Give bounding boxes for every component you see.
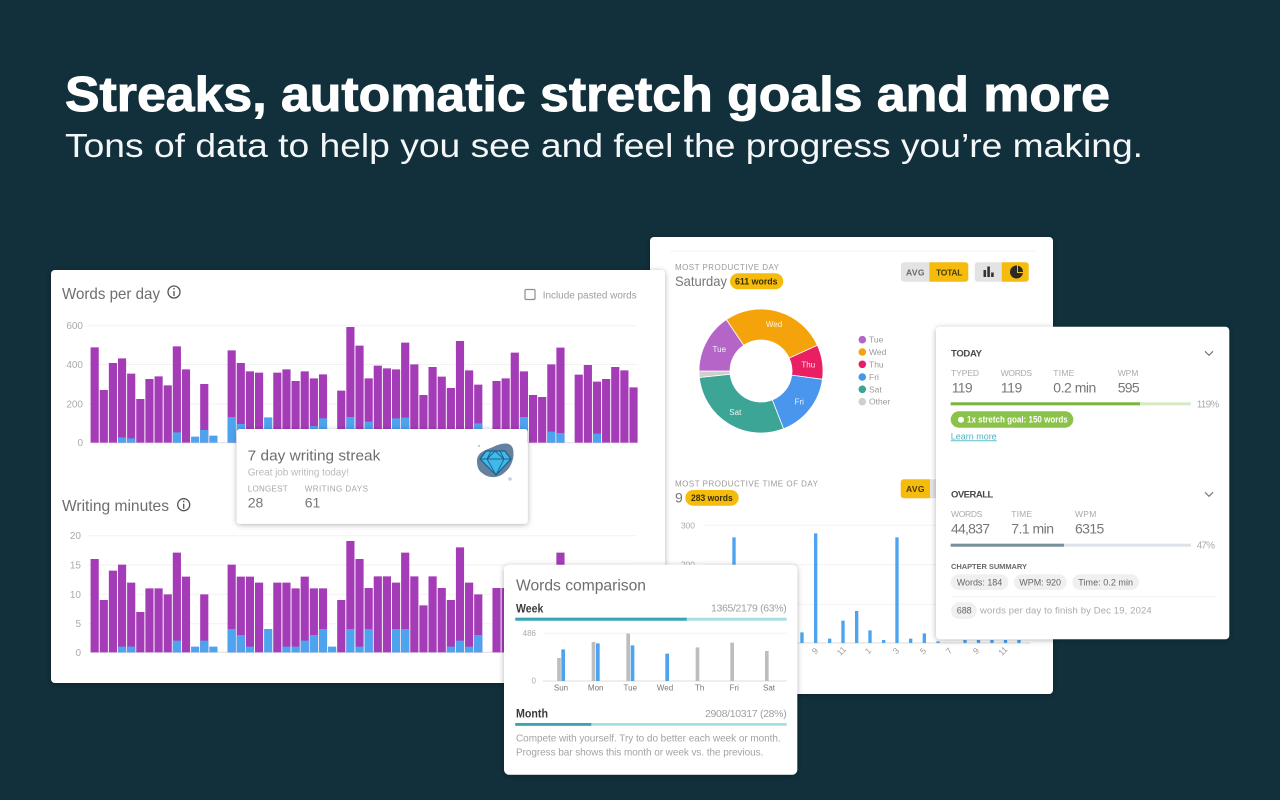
weekly bar chart: Sat <box>763 684 776 693</box>
best day words pill: 611 words <box>735 276 778 286</box>
today heading: TODAY <box>951 348 983 359</box>
learn more link: Learn more <box>951 431 997 441</box>
time of day bar chart: 5 <box>918 645 928 656</box>
comparison description: Compete with yourself. Try to do better each week or month. <box>516 734 781 745</box>
today progress bar <box>951 400 1219 410</box>
icon: chevron overall <box>1205 492 1213 496</box>
stat: writing days: WRITING DAYS <box>305 485 368 494</box>
writing minutes chart: 15 <box>70 560 81 572</box>
writing minutes chart <box>70 531 637 659</box>
panel: words comparison <box>504 565 797 775</box>
chart type toggle icons <box>975 262 1029 282</box>
overall stat labels: TIME <box>1011 509 1032 519</box>
most productive time label: MOST PRODUCTIVE TIME OF DAY <box>675 480 819 489</box>
writing minutes chart: 10 <box>70 590 81 601</box>
title: Streaks, automatic stretch goals and more <box>65 68 1110 122</box>
stat: writing days <box>305 485 368 511</box>
words per day to finish <box>951 602 1152 619</box>
time of day bar chart: 200 <box>681 560 695 570</box>
month label: Month <box>516 707 548 721</box>
stretch goal pill <box>951 411 1073 428</box>
chapter summary pills <box>951 574 1139 590</box>
donut legend: Sat <box>869 384 882 394</box>
today stat labels: WORDS <box>1001 368 1032 378</box>
today progress bar: 119% <box>1197 400 1219 410</box>
today stat values: 595 <box>1118 379 1140 395</box>
week progress bar <box>515 618 787 621</box>
time of day bar chart: 1 <box>863 645 873 656</box>
include pasted words checkbox: Include pasted words <box>543 290 637 301</box>
stretch goal pill: 1x stretch goal: 150 words <box>967 414 1068 424</box>
callout: writing streak <box>237 429 528 524</box>
weekly bar chart <box>523 629 787 693</box>
slice: Tue <box>699 320 744 371</box>
avg total toggle <box>901 262 968 282</box>
overall stat values: 6315 <box>1075 520 1105 536</box>
time of day bar chart <box>681 520 1030 658</box>
words per day heading: Words per day <box>62 286 160 303</box>
words per day chart: 0 <box>77 438 83 449</box>
time of day bar chart: 9 <box>810 645 820 656</box>
donut legend: Other <box>869 397 890 407</box>
weekly bar chart: Sun <box>554 684 568 693</box>
weekly bar chart: Th <box>695 684 704 693</box>
slice: Sat <box>699 374 784 433</box>
comparison heading: Words comparison <box>516 578 646 595</box>
streak message: Great job writing today! <box>248 467 349 478</box>
overall progress bar <box>951 540 1215 552</box>
week value: 1365/2179 (63%) <box>711 603 787 615</box>
today stat values: 119 <box>1001 379 1023 395</box>
weekly bar chart: Fri <box>730 684 739 693</box>
donut chart <box>699 309 823 433</box>
time of day bar chart: 9 <box>971 645 981 656</box>
stat: writing days: 61 <box>305 495 320 511</box>
overall progress bar: 47% <box>1197 540 1215 552</box>
stat: longest: LONGEST <box>248 485 288 494</box>
writing minutes chart: 5 <box>75 619 81 630</box>
today stat values <box>952 379 1140 395</box>
chapter summary label: CHAPTER SUMMARY <box>951 562 1027 571</box>
donut slice labels: Thu <box>801 360 815 369</box>
time of day bar chart: 7 <box>944 645 954 656</box>
subtitle: Tons of data to help you see and feel the progress you’re making. <box>65 127 1143 164</box>
today stat labels: WPM <box>1118 368 1138 378</box>
donut slice labels: Fri <box>795 398 804 407</box>
best hour words pill: 283 words <box>691 493 733 503</box>
today stat labels: TYPED <box>951 368 979 378</box>
donut legend <box>858 335 890 407</box>
chapter summary pills: WPM: 920 <box>1019 577 1061 587</box>
best hour: 9 <box>675 489 683 505</box>
best day: Saturday <box>675 273 727 289</box>
avg total toggle: AVG <box>906 268 925 278</box>
comparison description <box>516 734 781 759</box>
donut legend: Thu <box>869 359 884 369</box>
avg total toggle: TOTAL <box>936 268 962 278</box>
words per day to finish: words per day to finish by Dec 19, 2024 <box>979 606 1152 616</box>
avg total toggle, time chart <box>901 479 969 498</box>
icon: info minutes <box>178 499 190 511</box>
time of day bar chart: 11 <box>835 644 848 658</box>
chapter summary pills: Words: 184 <box>957 577 1002 587</box>
overall stat labels <box>951 509 1096 519</box>
donut slice labels: Tue <box>713 345 727 354</box>
donut slice labels <box>713 320 815 417</box>
most productive day label: MOST PRODUCTIVE DAY <box>675 263 780 272</box>
weekly bar chart: Wed <box>657 684 673 693</box>
overall stat values: 7.1 min <box>1011 520 1054 536</box>
words per day chart: 400 <box>66 360 83 371</box>
weekly bar chart: 0 <box>532 677 537 686</box>
today stat values: 119 <box>952 379 973 395</box>
panel: most productive stats <box>650 237 1053 694</box>
words per day chart <box>66 321 637 449</box>
slice: Other <box>699 371 730 377</box>
chapter summary pills: Time: 0.2 min <box>1078 577 1133 587</box>
time of day bar chart: 11 <box>996 644 1010 658</box>
week label: Week <box>516 601 544 615</box>
today stat labels: TIME <box>1053 368 1075 378</box>
words per day chart: 200 <box>66 400 83 410</box>
slice: Thu <box>789 345 823 379</box>
comparison description: Progress bar shows this month or week vs. the previous. <box>516 748 763 759</box>
icon: info words <box>168 286 180 298</box>
overall stat values: 44,837 <box>951 520 990 536</box>
donut legend: Fri <box>869 372 879 382</box>
weekly bar chart: Mon <box>588 684 603 693</box>
month value: 2908/10317 (28%) <box>705 708 787 720</box>
slice: Fri <box>772 375 822 429</box>
donut slice labels: Sat <box>729 408 742 417</box>
words per day to finish: 688 <box>957 606 972 616</box>
donut legend: Wed <box>869 347 887 357</box>
time of day bar chart: 300 <box>681 520 695 530</box>
weekly bar chart: 486 <box>523 629 537 638</box>
time of day bar chart: 3 <box>891 645 901 656</box>
stat: longest: 28 <box>248 495 263 511</box>
panel: today and overall stats <box>936 327 1229 639</box>
writing minutes chart: 0 <box>75 648 81 659</box>
avg total toggle, time chart: AVG <box>906 484 925 494</box>
donut slice labels: Wed <box>766 320 782 329</box>
best hour words pill <box>685 490 739 506</box>
streak heading: 7 day writing streak <box>248 447 381 464</box>
icon: diamond <box>477 444 514 481</box>
icon: chevron today <box>1205 351 1213 355</box>
slice: Wed <box>726 309 817 358</box>
best day words pill <box>730 273 783 289</box>
words per day chart: 600 <box>66 321 83 332</box>
overall stat labels: WORDS <box>951 509 983 519</box>
panel: words per day and writing minutes <box>51 270 665 683</box>
overall stat labels: WPM <box>1075 509 1096 519</box>
weekly bar chart: Tue <box>624 684 638 693</box>
overall heading: OVERALL <box>951 489 993 500</box>
today stat values: 0.2 min <box>1053 379 1096 395</box>
overall stat values <box>951 520 1105 536</box>
donut legend: Tue <box>869 335 884 345</box>
writing minutes heading: Writing minutes <box>62 498 169 515</box>
writing minutes chart: 20 <box>70 531 81 542</box>
stat: longest <box>248 485 288 511</box>
month progress bar <box>515 723 787 726</box>
today stat labels <box>951 368 1138 378</box>
